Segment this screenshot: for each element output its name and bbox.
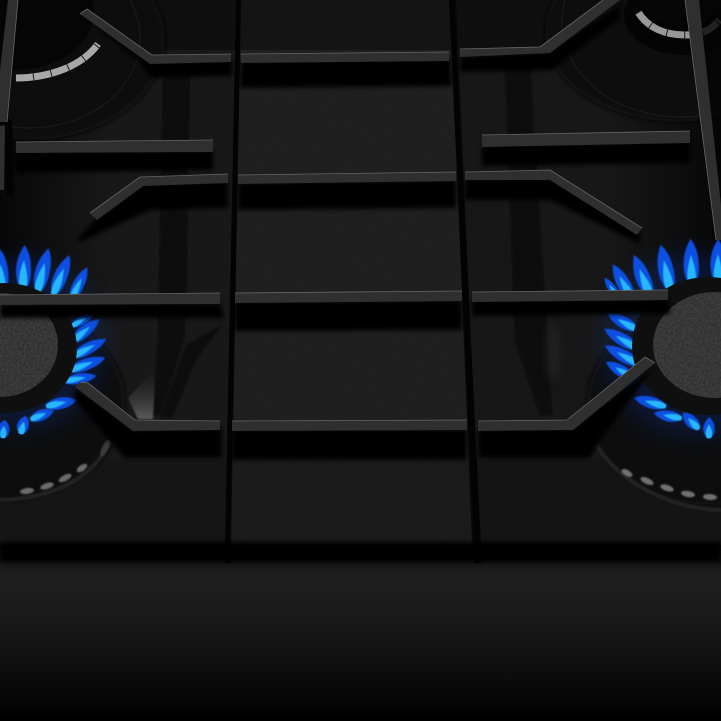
leg: right [505,65,552,415]
base rim highlight [0,442,110,500]
crown ring ticks [15,44,98,78]
seam: right [449,0,481,545]
grate [0,0,721,460]
burner: lower right [587,239,721,510]
left vignette [0,0,110,300]
front surface [0,545,721,721]
seam: left [225,0,241,545]
grate: row 5 center [232,420,467,460]
burner base [587,305,721,505]
grate: row 3 left [78,174,228,242]
grate: row 3 right [465,170,642,244]
panel seams [225,0,481,545]
base rim [0,0,140,128]
grate: row 2 left [16,140,213,173]
grate: row 1 right [460,0,620,72]
burner: upper right [545,0,721,122]
center panel texture [231,0,472,545]
panel: left [0,0,238,545]
base dashes [20,439,112,495]
burner crown ring [638,12,719,35]
flame ring [0,245,109,439]
cap texture [0,293,58,397]
burner cap stone [0,293,58,397]
burner cap ring [632,277,721,415]
burner: upper left [0,0,165,140]
cap texture [653,292,721,398]
base dashes [620,467,717,500]
burner: lower left [0,245,125,500]
grate: row 5 left [75,382,222,458]
grate: row 2 right [482,131,690,166]
burner base [545,0,721,122]
top shade [0,0,721,50]
panel: center [231,0,472,545]
light reflection: left [128,368,156,419]
grate: row 1 left [80,9,232,78]
right vignette [610,0,721,300]
panel: right [456,0,721,545]
leg: left [152,70,190,415]
crown cap [638,0,721,24]
light reflection: right [547,322,559,382]
base rim [562,0,721,117]
burner base [0,0,165,140]
grate support legs [128,65,559,419]
crown cap [0,0,94,70]
leg: left lower diagonal [160,325,222,418]
burner crown ring [15,44,98,78]
countertop front [0,542,721,721]
center seam ends [225,545,231,563]
glow [0,259,104,431]
side shading [0,0,721,300]
glow [603,253,721,437]
crown ring ticks [638,12,719,35]
burner cap stone [653,292,721,398]
grate: row 4 left [0,293,224,318]
grate: upper left rail [0,0,18,195]
grate: row 3 center [238,172,456,210]
right seam end [474,545,481,563]
grate: row 4 center [235,291,462,331]
cooktop panels [0,0,721,545]
grate: row 1 center [240,52,452,88]
cooktop front edge shadow [0,542,721,562]
lower panel shade [0,460,721,545]
grate: row 4 right [472,290,670,316]
grate: upper right rail [685,0,721,240]
burner cap ring [0,283,77,413]
grate: row 5 right [478,357,655,458]
crown shadow [624,0,721,55]
base rim highlight [596,445,721,510]
burner base [0,304,125,500]
flame ring [601,239,721,438]
